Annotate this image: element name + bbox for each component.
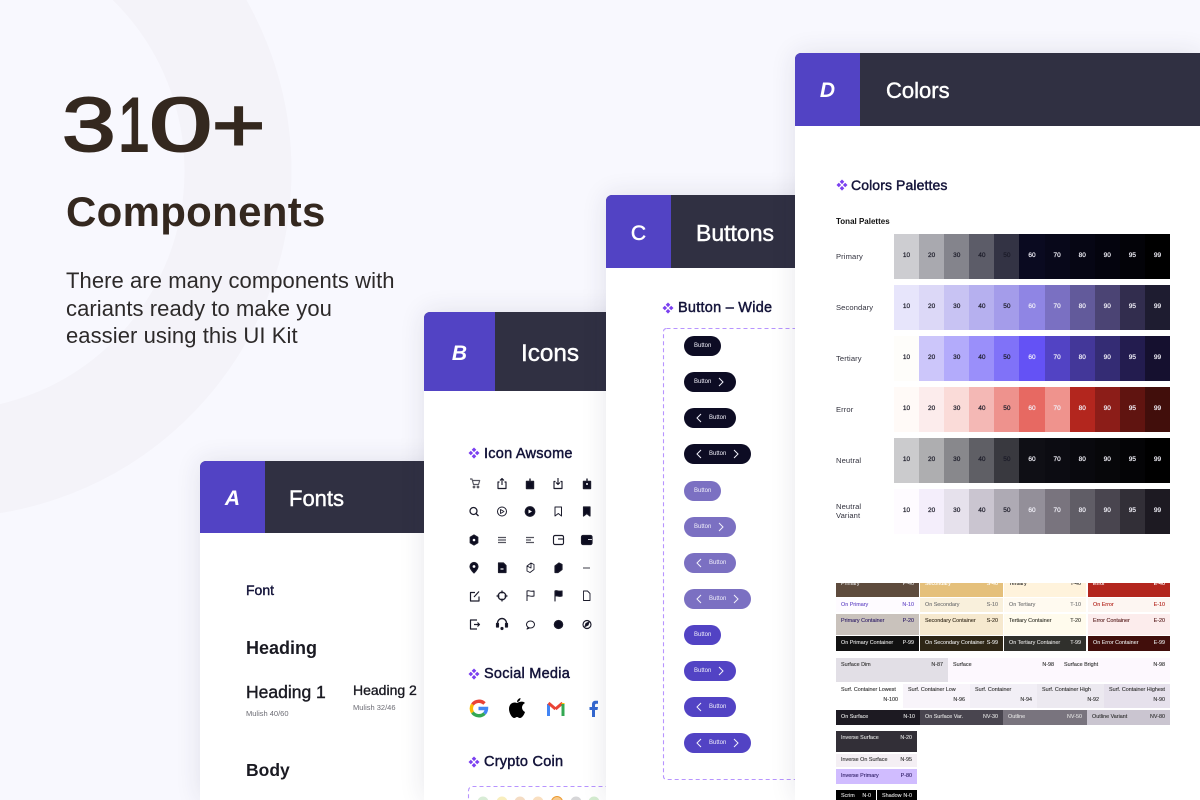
button with left arrow xyxy=(684,553,736,573)
button with right arrow: Button xyxy=(694,668,711,674)
header: Icons xyxy=(424,312,644,391)
label: Neutral Variant: Variant xyxy=(836,511,860,520)
roles: containers: E-20 xyxy=(1154,618,1165,624)
palette: Neutral: 60 xyxy=(1028,456,1036,463)
palette: Tertiary: 95 xyxy=(1129,354,1136,361)
palette: Neutral Variant xyxy=(903,489,1170,534)
roles: on containers: On Tertiary Container xyxy=(1009,640,1060,646)
button with left arrow: Button xyxy=(709,415,726,421)
button with both arrows: Button xyxy=(709,740,726,746)
palette: Tertiary: 90 xyxy=(1104,354,1111,361)
panel: A Fonts xyxy=(200,461,500,800)
button with left arrow xyxy=(684,697,736,717)
palette: Neutral: 70 xyxy=(1053,456,1061,463)
roles: on containers: On Error Container xyxy=(1093,640,1139,646)
roles: on surface and outline: Outline Variant xyxy=(1092,714,1127,720)
section heading: Colors Palettes: Colors Palettes xyxy=(851,177,947,193)
button with left arrow xyxy=(684,408,736,428)
palette: Neutral: 50 xyxy=(1003,456,1011,463)
section heading: Icon Awsome: Icon Awsome xyxy=(484,446,573,462)
roles: containers: P-20 xyxy=(903,618,914,624)
roles: containers xyxy=(836,614,1170,635)
palette: Error: 99 xyxy=(1154,405,1161,412)
palette: Tertiary: 30 xyxy=(953,354,960,361)
sample: Heading 1: Heading 1 xyxy=(246,682,326,702)
palette: Tertiary: 50 xyxy=(1003,354,1011,361)
roles: inverse: Shadow xyxy=(882,793,901,799)
palette: Neutral: 80 xyxy=(1079,456,1086,463)
panel: C Buttons xyxy=(606,195,846,800)
roles: inverse: Scrim xyxy=(841,793,855,799)
roles: on colors: On Tertiary xyxy=(1009,602,1035,608)
subheading: Tonal Palettes: Tonal Palettes xyxy=(836,217,890,226)
header title: Fonts xyxy=(289,486,344,511)
palette: Error: 70 xyxy=(1053,405,1061,412)
button: Button xyxy=(694,488,711,494)
crypto coin box xyxy=(468,786,638,800)
header: Fonts xyxy=(200,461,500,533)
icon: Facebook xyxy=(590,701,598,717)
roles: surface containers: N-90 xyxy=(1153,697,1165,703)
roles: on surface and outline: NV-80 xyxy=(1150,714,1165,720)
palette: Secondary: 95 xyxy=(1129,303,1136,310)
badge B xyxy=(424,312,495,391)
button group: primary purple xyxy=(684,625,751,753)
palette: Neutral: 95 xyxy=(1129,456,1136,463)
roles: on containers: S-99 xyxy=(987,640,998,646)
palette: Tertiary: 10 xyxy=(903,354,910,361)
palette: Neutral Variant: 99 xyxy=(1154,507,1161,514)
header title: Buttons xyxy=(696,220,774,246)
palette: Secondary: 40 xyxy=(978,303,985,310)
roles: on colors: T-10 xyxy=(1070,602,1081,608)
button with left arrow: Button xyxy=(709,560,726,566)
palette: Primary: 70 xyxy=(1053,252,1061,259)
palette: Tertiary: 99 xyxy=(1154,354,1161,361)
button with both arrows xyxy=(684,589,751,609)
label: Font: Font xyxy=(246,582,274,598)
note: Mulish 32/46: Mulish 32/46 xyxy=(353,703,396,712)
roles: inverse: N-95 xyxy=(900,757,912,763)
header: Colors xyxy=(795,53,1200,126)
roles: surface containers: Surf. Container Low xyxy=(908,687,956,693)
sample: Heading 2: Heading 2 xyxy=(353,682,417,698)
icon: diamond markers xyxy=(468,448,480,768)
palette: Secondary: 20 xyxy=(928,303,935,310)
palette: Primary: 40 xyxy=(978,252,985,259)
palette: Neutral Variant: 30 xyxy=(953,507,960,514)
roles: containers: Primary Container xyxy=(841,618,884,624)
button xyxy=(684,336,721,356)
label: Neutral Variant: Neutral xyxy=(836,502,861,511)
palette: Primary: 90 xyxy=(1104,252,1111,259)
palette: Primary: 20 xyxy=(928,252,935,259)
button xyxy=(684,625,721,645)
roles: containers: S-20 xyxy=(987,618,998,624)
button with left arrow: Button xyxy=(709,704,726,710)
palette: Neutral Variant: 70 xyxy=(1053,507,1061,514)
roles: inverse xyxy=(836,731,917,800)
roles: on colors: On Secondary xyxy=(925,602,959,608)
button with right arrow xyxy=(684,661,736,681)
palette: Primary xyxy=(894,234,1170,279)
header: Buttons xyxy=(606,195,846,268)
palette: Neutral: 10 xyxy=(903,456,910,463)
roles: surfaces: Surface Dim xyxy=(841,662,871,668)
palette: Error: 40 xyxy=(978,405,985,412)
color roles table xyxy=(836,583,1170,800)
roles: surfaces xyxy=(836,658,1165,682)
roles: inverse: Inverse Surface xyxy=(841,735,879,741)
palette: Error: 50 xyxy=(1003,405,1011,412)
roles: containers: Tertiary Container xyxy=(1009,618,1052,624)
roles: surface containers: N-100 xyxy=(883,697,898,703)
button with both arrows: Button xyxy=(709,596,726,602)
palette: Secondary: 99 xyxy=(1154,303,1161,310)
palette: Error: 90 xyxy=(1104,405,1111,412)
label: Error: Error xyxy=(836,405,853,414)
palette: Secondary: 70 xyxy=(1053,303,1061,310)
palette: Error: 20 xyxy=(928,405,935,412)
icon: Google xyxy=(471,701,486,716)
label: Secondary: Secondary xyxy=(836,303,873,312)
palette: Error xyxy=(903,387,1170,432)
roles: on colors: S-10 xyxy=(987,602,998,608)
roles: surface containers: Surf. Container Lowest xyxy=(841,687,896,693)
button with right arrow: Button xyxy=(694,379,711,385)
roles: on colors: E-10 xyxy=(1154,602,1165,608)
roles: containers: Error Container xyxy=(1093,618,1130,624)
palette: Neutral: 30 xyxy=(953,456,960,463)
palette: Neutral: 90 xyxy=(1104,456,1111,463)
roles: on surface and outline: Outline xyxy=(1008,714,1025,720)
badge D xyxy=(795,53,860,126)
title: 310+: 1 xyxy=(118,83,150,168)
description text: eassier using this UI Kit xyxy=(66,323,298,348)
button group: muted purple xyxy=(684,481,751,609)
label: Heading: Heading xyxy=(246,638,317,658)
button: Button xyxy=(694,632,711,638)
button: Button xyxy=(694,343,711,349)
palette: Error: 80 xyxy=(1079,405,1086,412)
palette: Secondary xyxy=(894,285,1170,330)
icon artwork xyxy=(468,448,606,800)
button with both arrows xyxy=(684,733,751,753)
roles: on containers: On Primary Container xyxy=(841,640,893,646)
roles: on containers: E-99 xyxy=(1154,640,1165,646)
roles: surface containers xyxy=(841,684,1170,708)
icon grid: outline and solid icons xyxy=(470,478,592,630)
palette: Error: 60 xyxy=(1028,405,1036,412)
palette: Secondary: 90 xyxy=(1104,303,1111,310)
icon: diamond xyxy=(836,180,848,190)
section heading: Button Wide: Button – Wide xyxy=(678,300,772,316)
title: 310+: + xyxy=(212,83,266,168)
roles: on surface and outline: On Surface xyxy=(841,714,868,720)
roles: on surface and outline: On Surface Var. xyxy=(925,714,963,720)
palette: Tertiary: 60 xyxy=(1028,354,1036,361)
roles: surfaces: Surface xyxy=(953,662,972,668)
palette: Neutral Variant: 90 xyxy=(1104,507,1111,514)
header title: Colors xyxy=(886,78,950,103)
button with both arrows: Button xyxy=(709,451,726,457)
panel: D Colors xyxy=(795,53,1200,800)
icon: Gmail xyxy=(548,703,563,716)
roles: surface containers: Surf. Container High xyxy=(1042,687,1091,693)
palette: Neutral Variant: 60 xyxy=(1028,507,1036,514)
roles: on containers xyxy=(836,636,1170,651)
palette: Neutral Variant: 10 xyxy=(903,507,910,514)
roles: inverse: Inverse On Surface xyxy=(841,757,887,763)
roles: surfaces: Surface Bright xyxy=(1064,662,1098,668)
palette: Primary: 30 xyxy=(953,252,960,259)
roles: on surface and outline: NV-50 xyxy=(1067,714,1082,720)
badge B: B xyxy=(452,342,467,365)
palette: Error: 95 xyxy=(1129,405,1136,412)
button with right arrow xyxy=(684,372,736,392)
roles: cropped top row xyxy=(836,583,1170,597)
label: Neutral Variant xyxy=(836,502,861,520)
section heading: Crypto Coin: Crypto Coin xyxy=(484,754,563,770)
palette: Neutral: 40 xyxy=(978,456,985,463)
palette: Neutral Variant: 80 xyxy=(1079,507,1086,514)
palette: Neutral: 99 xyxy=(1154,456,1161,463)
roles: surfaces: N-98 xyxy=(1153,662,1165,668)
roles: containers: T-20 xyxy=(1070,618,1081,624)
button with right arrow: Button xyxy=(694,524,711,530)
roles: inverse: P-80 xyxy=(901,773,912,779)
palette: Secondary: 50 xyxy=(1003,303,1011,310)
label: Neutral: Neutral xyxy=(836,456,861,465)
description text: There are many components with xyxy=(66,268,395,293)
palette: Secondary: 80 xyxy=(1079,303,1086,310)
icon: Apple xyxy=(509,698,525,718)
roles: inverse: N-20 xyxy=(900,735,912,741)
roles: on containers: P-99 xyxy=(903,640,914,646)
button with both arrows xyxy=(684,444,751,464)
palette: Primary: 80 xyxy=(1079,252,1086,259)
button group: dark xyxy=(684,336,751,464)
roles: on surface and outline: NV-30 xyxy=(983,714,998,720)
roles: inverse: Inverse Primary xyxy=(841,773,879,779)
badge C xyxy=(606,195,671,268)
button with right arrow xyxy=(684,517,736,537)
roles: on surface and outline: N-10 xyxy=(903,714,915,720)
roles: on containers: T-99 xyxy=(1070,640,1081,646)
heading: Components: Components xyxy=(66,188,326,235)
palette: Neutral Variant: 20 xyxy=(928,507,935,514)
roles: containers: Secondary Container xyxy=(925,618,976,624)
roles: surface containers: Surf. Container Highest xyxy=(1109,687,1165,693)
header title: Icons xyxy=(521,340,579,367)
palette: Primary: 50 xyxy=(1003,252,1011,259)
badge A xyxy=(200,461,265,533)
title: 310+ xyxy=(62,83,266,168)
roles: surface containers: N-94 xyxy=(1020,697,1032,703)
label: Body: Body xyxy=(246,760,290,780)
roles: inverse: N-0 xyxy=(862,793,871,799)
palette: Primary: 95 xyxy=(1129,252,1136,259)
roles: surfaces: N-87 xyxy=(931,662,943,668)
button xyxy=(684,481,721,501)
roles: surface containers: N-92 xyxy=(1087,697,1099,703)
palette: Secondary: 30 xyxy=(953,303,960,310)
palette: Neutral xyxy=(894,438,1170,483)
palette: Error: 30 xyxy=(953,405,960,412)
roles: on colors: On Primary xyxy=(841,602,868,608)
title: 310+: 3 xyxy=(62,83,116,168)
palette: Neutral Variant: 50 xyxy=(1003,507,1011,514)
roles: surfaces: N-98 xyxy=(1042,662,1054,668)
palette: Primary: 99 xyxy=(1154,252,1161,259)
palette: Neutral Variant: 95 xyxy=(1129,507,1136,514)
palette: Error: 10 xyxy=(903,405,910,412)
palette: Tertiary: 80 xyxy=(1079,354,1086,361)
palette: Primary: 60 xyxy=(1028,252,1036,259)
title: 310+: 0 xyxy=(149,83,212,168)
roles: surface containers: N-96 xyxy=(953,697,965,703)
label: Tertiary: Tertiary xyxy=(836,354,862,363)
badge A: A xyxy=(225,487,240,510)
palette: Tertiary: 20 xyxy=(928,354,935,361)
roles: on colors: On Error xyxy=(1093,602,1114,608)
palette: Primary: 10 xyxy=(903,252,910,259)
roles: on containers: On Secondary Container xyxy=(925,640,984,646)
palette: Secondary: 10 xyxy=(903,303,910,310)
roles: surface containers: Surf. Container xyxy=(975,687,1011,693)
palette: Neutral Variant: 40 xyxy=(978,507,985,514)
description text xyxy=(66,268,395,348)
roles: on colors xyxy=(841,598,1170,612)
note: Mulish 40/60: Mulish 40/60 xyxy=(246,709,289,718)
label: Primary: Primary xyxy=(836,252,863,261)
description text: cariants ready to make you xyxy=(66,296,332,320)
panel: B Icons xyxy=(424,312,644,800)
section heading: Social Media: Social Media xyxy=(484,666,570,682)
badge C: C xyxy=(631,222,646,245)
palette: Tertiary: 40 xyxy=(978,354,985,361)
palette: Neutral: 20 xyxy=(928,456,935,463)
palette: Tertiary: 70 xyxy=(1053,354,1061,361)
roles: on colors: N-10 xyxy=(902,602,914,608)
roles: on surface and outline xyxy=(836,710,1170,725)
palette: Tertiary xyxy=(903,336,1170,381)
palette: Secondary: 60 xyxy=(1028,303,1036,310)
roles: inverse: N-0 xyxy=(903,793,912,799)
badge D: D xyxy=(820,79,835,102)
diamond and dashed frame xyxy=(662,302,795,780)
